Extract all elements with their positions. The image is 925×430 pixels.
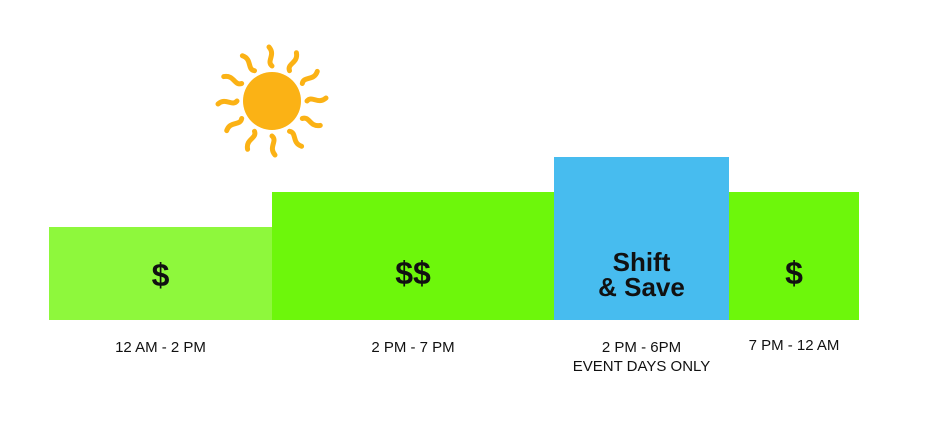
- bar: 7PM-12AM: $: [785, 254, 803, 290]
- icon: sun: [216, 44, 328, 158]
- bar: 12AM-2PM: [49, 227, 272, 320]
- label: 2 PM - 6PM event days: [573, 339, 710, 375]
- bar: shift and save: [554, 157, 729, 320]
- label: 2 PM - 7 PM: 2 PM - 7 PM: [371, 339, 455, 356]
- bar: 7PM-12AM: [729, 192, 859, 320]
- label: 2 PM - 6PM event days: 2 PM - 6PM: [602, 339, 681, 356]
- bar: 12AM-2PM: $: [152, 257, 169, 293]
- label: 7 PM - 12 AM: 7 PM - 12 AM: [749, 337, 839, 354]
- bar: shift and save: Shift: [613, 246, 670, 276]
- label: 2 PM - 6PM event days: EVENT DAYS ONLY: [573, 358, 710, 375]
- bar: 2PM-7PM: $$: [395, 254, 431, 290]
- bar: 2PM-7PM: [272, 192, 554, 320]
- bar: shift and save: & Save: [598, 272, 685, 302]
- label: 12 AM - 2 PM: 12 AM - 2 PM: [115, 339, 206, 356]
